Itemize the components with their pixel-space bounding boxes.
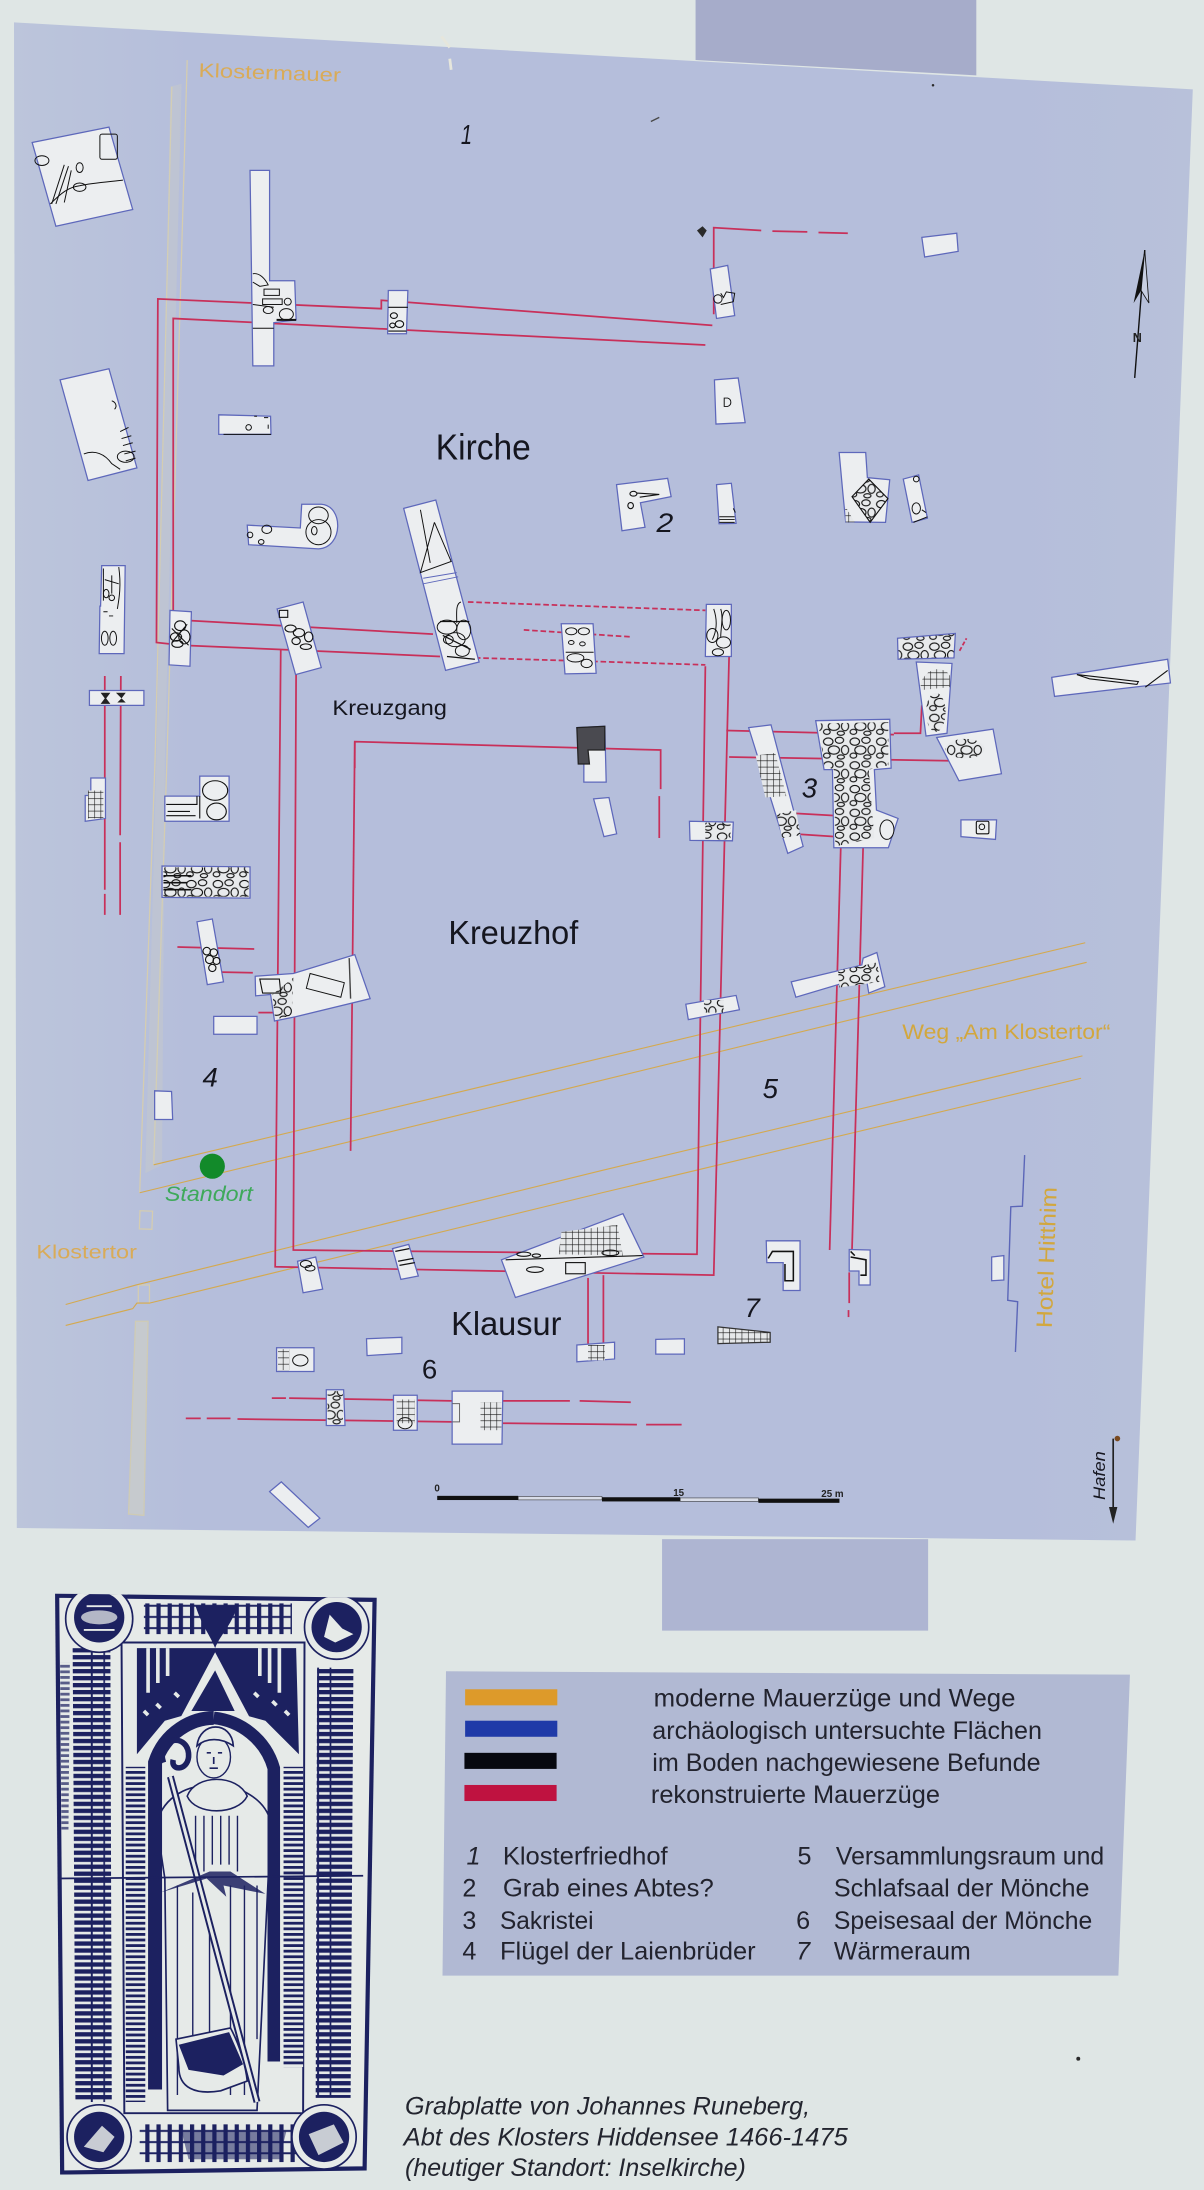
standort marker [200,1154,225,1179]
scale bar: 0 [434,1484,440,1495]
top inscription band [144,1603,292,1634]
panel: excavation plan of the monastery [14,22,1193,1541]
trench: long stone wall [162,866,250,898]
trench: east small [717,483,736,524]
top colour block [696,0,976,75]
gable inner [191,1670,235,1711]
numbered key left [462,1843,756,1966]
trench: dark courtyard fill [577,726,606,782]
trench: east square with Q mark [961,820,997,839]
trench: west double wall [85,778,105,821]
figure robe [156,1785,271,2110]
icon: north arrow: N [1133,331,1142,345]
legend row: blue [465,1717,1042,1745]
numbered key right: Schlafsaal der Mönche [834,1875,1089,1903]
trench: diagonal blank south [270,1482,320,1527]
trench: west cloister with inner rectangle [255,955,370,1021]
trench: sacristy east [937,729,1001,781]
legend row: orange: moderne Mauerzüge und Wege [654,1685,1015,1713]
label: number 5: 5 [763,1073,778,1104]
trench: refectory pier 1 [326,1390,345,1425]
niche vertical tracery and flecks [144,1648,289,1715]
legend row: blue: archäologisch untersuchte Flächen [652,1717,1042,1745]
label: number 6: 6 [422,1355,437,1385]
trench: north transept [404,500,479,670]
trench: long north-south section [250,170,296,366]
caption: tomb slab [402,2093,849,2182]
trench: east road crossing [791,953,885,997]
trench: east with D mark [714,378,745,424]
numbered key right: Versammlungsraum und [836,1843,1104,1871]
numbered key right [796,1843,1104,1966]
label: number 7: 7 [744,1293,761,1323]
crack across slab [53,1876,363,1879]
numbered key left: 3 [462,1907,476,1935]
gable triangle [181,1652,250,1716]
numbered key left: 2 [462,1875,476,1903]
trench: refectory square [452,1391,503,1444]
red reconstructed wall lines [105,228,978,1425]
trench: oval stone south [277,1348,314,1372]
right side column [284,1767,303,2067]
trench: northwest cemetery [32,127,133,226]
caption: tomb slab: (heutiger Standort: Inselkirche) [405,2154,746,2182]
caption: tomb slab: Grabplatte von Johannes Runeberg, [405,2093,810,2121]
label: Standort: Standort [165,1183,254,1206]
label: Kreuzgang: Kreuzgang [332,697,447,720]
trench: north wall [388,291,408,334]
trench: south pier [577,1342,615,1362]
label: number 4: 4 [203,1063,218,1093]
label: Klausur: Klausur [451,1306,561,1343]
scale bar: 25 m [821,1489,844,1500]
slab outline [55,1594,377,2175]
label: number 3: 3 [802,773,818,804]
scale bar: 15 [673,1488,685,1499]
numbered key left: 1 [467,1843,481,1871]
label: number 2: 2 [655,508,674,538]
book and hands [161,1872,265,1897]
bottom colour block [662,1539,928,1631]
surface specks on the board [651,84,1120,2061]
trench: diamond paving [839,453,890,522]
icon: Hafen arrow: Hafen [1090,1451,1109,1500]
label: Hotel Hitthim: Hotel Hitthim [1032,1187,1062,1328]
corner medallion: bottom left [67,2105,131,2169]
icon: north arrow [1133,250,1149,378]
trench: south wall west [298,1257,323,1293]
crown finial [196,1606,237,1648]
right inscription column [316,1668,353,2098]
left inscription column [73,1648,112,2102]
trench: blank southeast [656,1339,684,1354]
trench: stones on crossing [197,919,223,985]
trench: blank south [367,1337,402,1356]
bottom inscription band [140,2124,296,2162]
legend row: red [464,1781,940,1809]
trench: blank rectangle west [214,1016,257,1034]
caption: tomb slab: Abt des Klosters Hiddensee 1466-1475 [402,2123,849,2151]
trench: double wall section [89,691,144,705]
blue outline: Hotel Hitthim [1008,1155,1025,1352]
corner medallion: top right [305,1595,369,1659]
trench: courtyard blank [594,798,617,837]
trench: south wing with grid [501,1214,644,1298]
numbered key left: Sakristei [500,1907,594,1935]
numbered key left: Klosterfriedhof [503,1843,669,1871]
numbered key right: 6 [796,1907,810,1935]
label: number 1: 1 [461,119,472,150]
legend row: red: rekonstruierte Mauerzüge [651,1781,940,1809]
legend row: orange [465,1685,1015,1713]
corner medallion: top left [66,1585,133,1652]
side columns [126,1767,145,2102]
top niche dark background [137,1648,299,1754]
label: Kirche: Kirche [436,427,531,468]
legend row: black: im Boden nachgewiesene Befunde [652,1749,1041,1777]
shield dark field [179,2032,243,2075]
illustration: tomb slab of Johannes Runeberg [53,1585,377,2175]
icon: Hafen arrow [1090,1439,1117,1524]
trench: far east [1052,659,1170,696]
head and cowl [187,1727,247,1811]
left outer narrow inscription [60,1662,70,1830]
trench: north-south wall crossing [165,776,229,821]
trench: west [60,369,137,480]
trench: far west [99,566,125,654]
trench: northeast corner [710,265,735,318]
crozier [162,1740,257,2102]
trench: nave centre [561,624,596,674]
numbered key left: Grab eines Abtes? [503,1875,714,1903]
trench: east nave crossing [705,604,731,656]
label: Klostermauer: Klostermauer [198,60,342,87]
trench: L-shaped east [849,1249,870,1285]
trench: wall crossing north [689,821,733,841]
label: Kreuzhof: Kreuzhof [448,915,579,952]
corner medallion: bottom right [292,2105,356,2169]
panel: legend [442,1671,1130,1976]
trench: warming room [718,1327,770,1344]
trench: grave of an abbot [617,478,671,531]
trench: road crossing centre [686,995,739,1020]
numbered key left: Flügel der Laienbrüder [500,1938,756,1966]
trench: beside hotel [992,1256,1004,1281]
trench: sacristy brick wall [749,725,803,853]
coat of arms shield [176,2028,247,2092]
white scuffs near the top edge [441,36,451,70]
trench: small blank west [155,1091,173,1119]
trench: cloister north [277,602,321,675]
trench: south wall centre [392,1244,418,1279]
numbered key left: 4 [462,1938,476,1966]
excavated trenches [32,127,1170,1527]
numbered key right: 7 [796,1938,811,1966]
trench: small rectangle [219,415,271,434]
trench: L-shaped warming room wall [766,1241,800,1291]
label: Klostertor: Klostertor [36,1241,137,1263]
numbered key right: 5 [798,1843,812,1871]
legend background [442,1671,1130,1976]
trench: sacristy centre [816,719,898,848]
map background [14,22,1193,1541]
monastery wall (modern, tan) [129,60,187,1515]
legend row: black [464,1749,1041,1777]
numbered key right: Speisesaal der Mönche [834,1907,1092,1935]
orange road lines: Weg Am Klostertor [66,943,1087,1325]
robe folds [177,1816,257,2095]
trench: northeast stones and grid [898,633,955,736]
scale bar [434,1484,844,1503]
trench: apse [247,504,338,549]
label: Weg Am Klostertor: Weg „Am Klostertor“ [902,1021,1110,1044]
trench: west wall crossing [169,610,191,666]
niche dark right jamb [214,1718,274,2062]
niche dark left jamb [155,1718,214,2089]
inner frame [122,1642,305,2113]
trench: refectory pier 2 [393,1395,417,1430]
numbered key right: Wärmeraum [834,1938,971,1966]
trench: east of diamond [903,475,927,522]
trench: small northeast rectangle [922,233,958,257]
bottom inscription smudge [182,2131,286,2159]
